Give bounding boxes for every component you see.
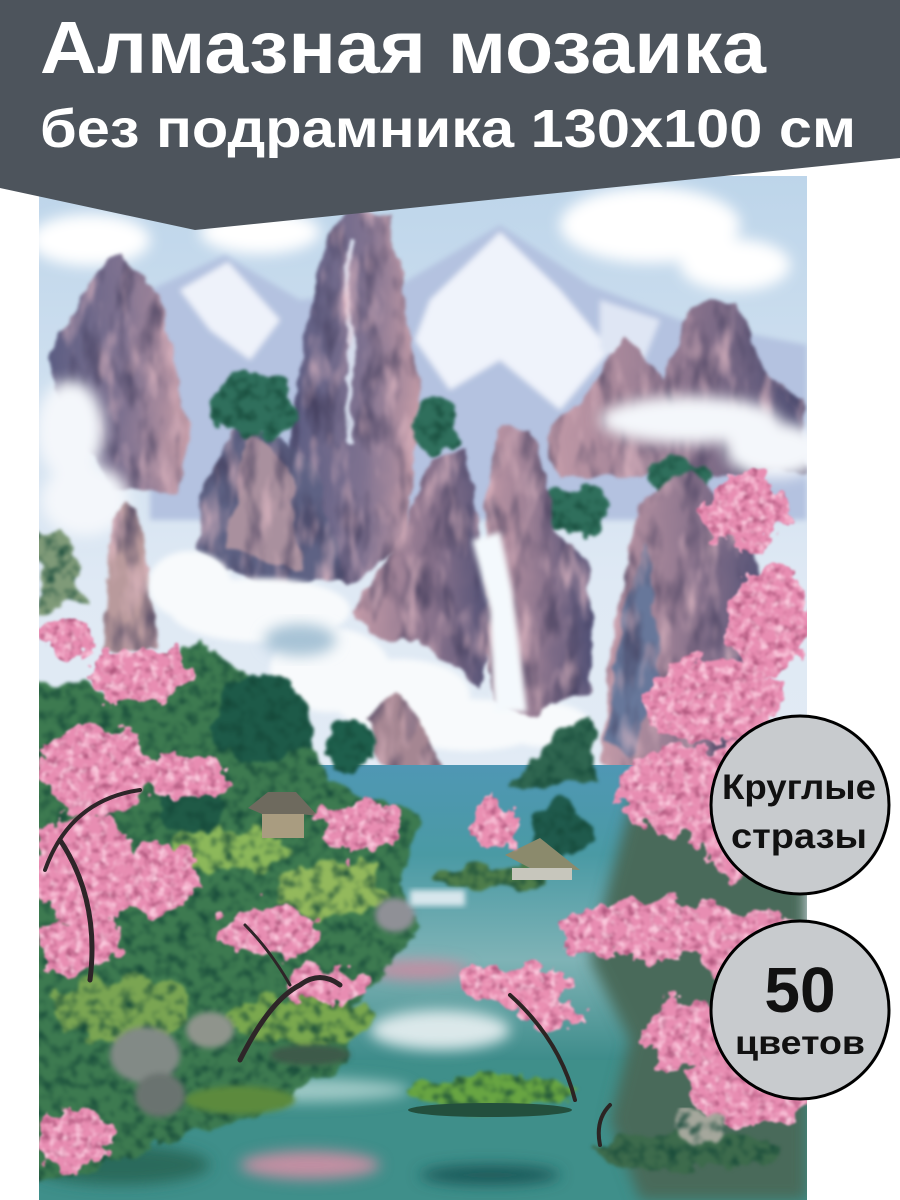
left tree branches: [45, 790, 340, 1060]
left cherry blossom trees: [33, 620, 402, 1170]
sky: [39, 176, 807, 920]
badge: round rhinestones: Круглые: [722, 768, 876, 807]
badge: round rhinestones: [711, 716, 889, 894]
left rock pillar: [103, 503, 158, 650]
clouds behind the peaks: [36, 380, 825, 536]
right distant peaks: [545, 300, 803, 480]
pagoda house: [248, 792, 318, 838]
title: Алмазная мозаика: [40, 6, 767, 89]
rocks on the shore: [110, 898, 415, 1117]
pine trees on the rocks: [215, 373, 714, 534]
right bottom foliage and rocks: [595, 1116, 785, 1170]
mossy island and small pavilion: [408, 800, 586, 1117]
center tree trunk: [510, 995, 610, 1145]
far left green bank: [39, 530, 85, 610]
left cliff: [45, 250, 190, 490]
right bank shadow: [590, 770, 807, 1200]
small rock on the lake: [364, 690, 444, 765]
lake and river: [30, 765, 807, 1200]
mid rock formations: [195, 420, 345, 590]
far right treeline: [515, 720, 595, 785]
left green hillside: [30, 640, 420, 1190]
painting: mountain landscape with cherry blossoms: [30, 176, 825, 1200]
right cherry blossom trees: [560, 474, 812, 1130]
badge: round rhinestones: стразы: [731, 817, 867, 856]
waterfall: [472, 532, 527, 712]
right great cliff: [598, 468, 762, 765]
center blossom tree: [460, 801, 591, 1029]
subtitle: без подрамника 130х100 см: [40, 99, 856, 159]
badge: 50 colours: [711, 921, 889, 1099]
white mid clouds: [148, 551, 590, 751]
blue haze valley: [264, 624, 336, 656]
badge: 50 colours: цветов: [735, 1024, 865, 1061]
header banner: [0, 0, 900, 230]
badge: 50 colours: 50: [764, 954, 836, 1026]
central tall peak: [290, 210, 422, 590]
snowy distant mountains: [150, 225, 807, 520]
central rocks: [350, 425, 592, 715]
